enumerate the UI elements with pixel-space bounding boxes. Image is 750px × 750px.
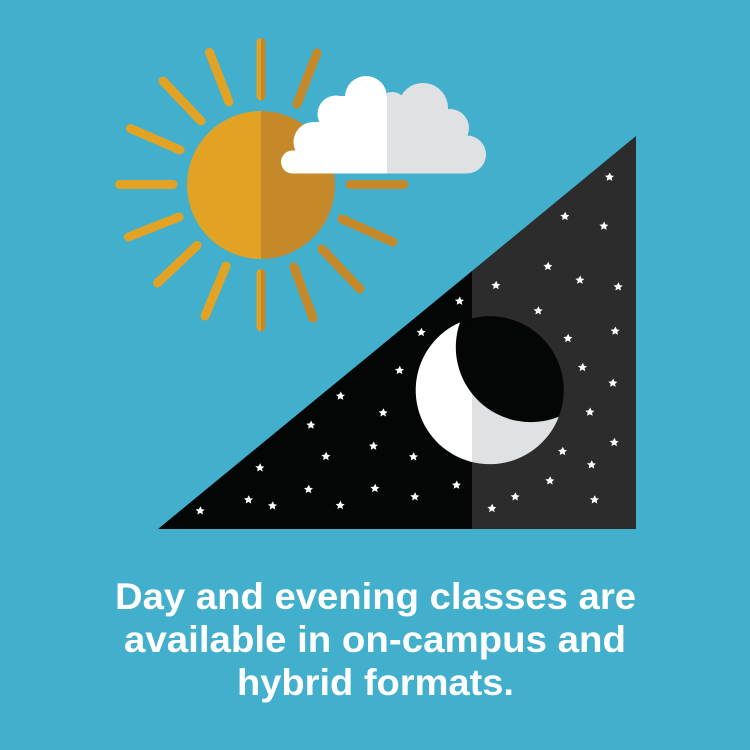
stars [196,172,623,515]
caption text: available in on-campus and [124,619,626,660]
infographic canvas [115,38,636,702]
icon: crescent moon [416,316,564,464]
triangle right grey section [472,136,636,529]
caption text: Day and evening classes are [115,576,636,617]
caption text [115,576,636,703]
moon crescent shaded part [472,394,559,464]
cloud lit half [281,76,388,174]
triangle left black section [158,271,472,529]
sun disc [187,111,335,259]
sun rays [120,42,404,327]
caption text: hybrid formats. [237,662,514,703]
night triangle [158,136,636,529]
icon: cloud [281,76,486,174]
moon dark disc [456,316,564,422]
cloud shaded half [377,83,486,174]
icon: sun [120,42,404,327]
moon crescent lit part [416,322,472,462]
